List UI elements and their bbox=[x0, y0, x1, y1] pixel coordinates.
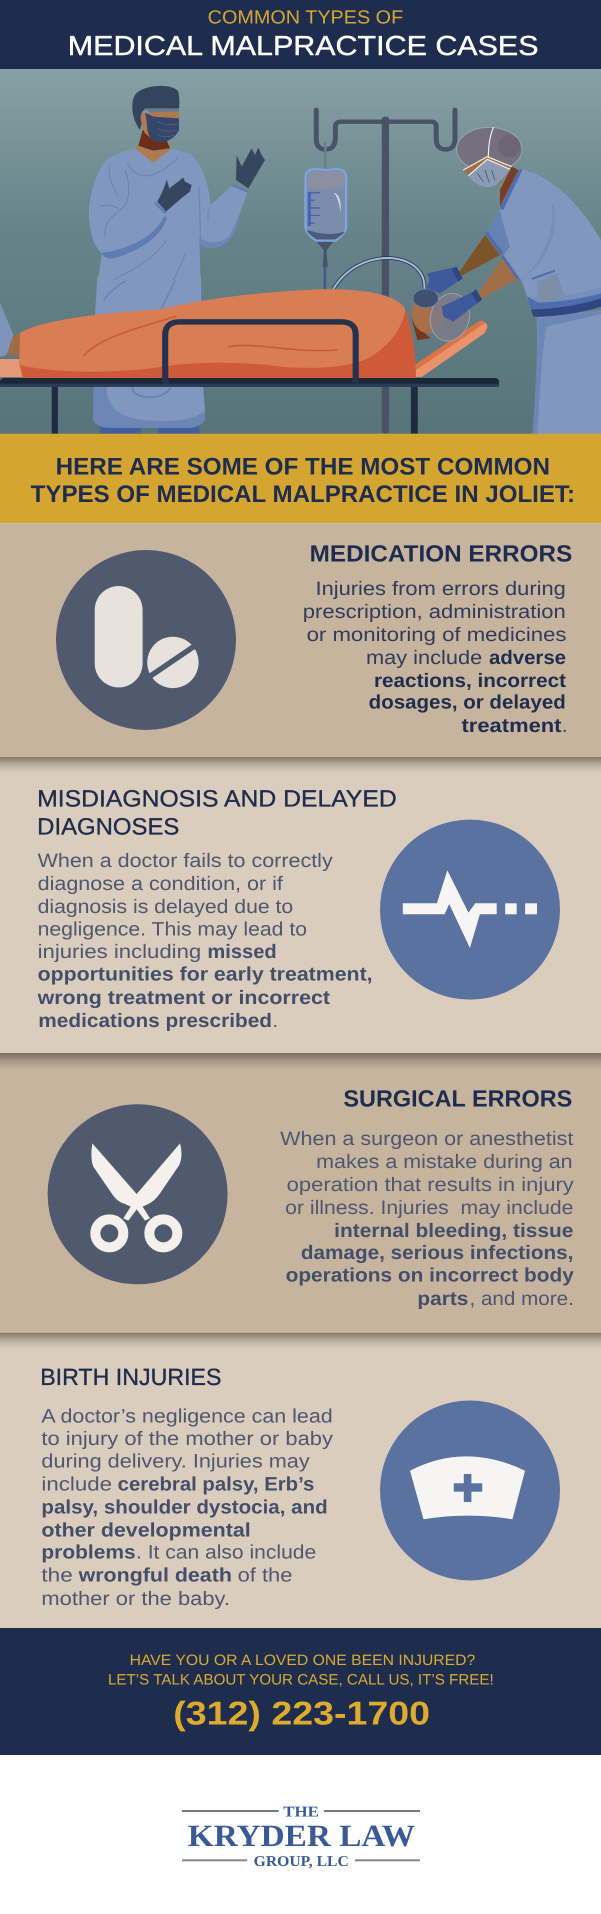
logo: the kryder law group: GROUP, LLC bbox=[254, 1854, 349, 1870]
call to action banner bbox=[0, 1628, 601, 1755]
text block: surgical errors: When a surgeon or anesthetist bbox=[280, 1128, 574, 1150]
banner heading: TYPES OF MEDICAL MALPRACTICE IN JOLIET: bbox=[31, 481, 575, 508]
text block: medication errors: reactions, incorrect bbox=[374, 670, 567, 692]
call to action text bbox=[108, 1652, 494, 1688]
illustration: operating room scene bbox=[0, 69, 601, 434]
text block: surgical errors: , and more. bbox=[470, 1288, 574, 1310]
text block: medication errors: or monitoring of medicines bbox=[307, 624, 567, 646]
heading: medication errors: MEDICATION ERRORS bbox=[310, 541, 572, 567]
logo: the kryder law group bbox=[0, 1755, 601, 1914]
text block: medication errors: prescription, administration bbox=[303, 601, 566, 623]
stretcher mat bbox=[0, 321, 488, 377]
text block: misdiagnosis: . bbox=[272, 1010, 278, 1032]
text block: misdiagnosis: When a doctor fails to correctly bbox=[38, 850, 333, 872]
text block: surgical errors: parts bbox=[417, 1288, 469, 1310]
patient arm bbox=[0, 303, 21, 357]
text block: birth injuries: include bbox=[41, 1474, 112, 1496]
gold banner bbox=[0, 434, 601, 523]
text block: birth injuries: during delivery. Injuries may bbox=[41, 1451, 310, 1473]
nurse and patient head bbox=[412, 127, 601, 434]
nurse shirt bbox=[486, 169, 601, 309]
text block: medication errors bbox=[303, 578, 567, 737]
panel: medication errors bbox=[0, 523, 601, 757]
text block: birth injuries: the bbox=[41, 1565, 73, 1587]
icon: pills bbox=[56, 550, 236, 730]
call to action text: HAVE YOU OR A LOVED ONE BEEN INJURED? bbox=[130, 1652, 475, 1669]
nurse arms bbox=[458, 235, 500, 276]
text block: misdiagnosis: diagnosis is delayed due to bbox=[38, 896, 293, 918]
heading: birth injuries: BIRTH INJURIES bbox=[40, 1364, 222, 1390]
text block: misdiagnosis: negligence. This may lead to bbox=[38, 919, 307, 941]
heading: misdiagnosis and delayed diagnoses bbox=[37, 786, 397, 840]
patient body under sheet bbox=[19, 289, 416, 378]
stretcher frame bbox=[0, 322, 499, 434]
doctor bbox=[89, 86, 265, 434]
text block: medication errors: adverse bbox=[489, 647, 566, 669]
text block: birth injuries: cerebral palsy, Erb’s bbox=[118, 1474, 314, 1496]
banner heading: HERE ARE SOME OF THE MOST COMMON bbox=[56, 453, 550, 480]
oxygen tube bbox=[333, 258, 424, 290]
logo: the kryder law group: THE bbox=[283, 1805, 319, 1821]
icon: heartbeat line bbox=[380, 820, 560, 1000]
text block: birth injuries: other developmental bbox=[41, 1519, 251, 1541]
iv bag bbox=[305, 169, 346, 241]
text block: misdiagnosis bbox=[37, 850, 373, 1032]
text block: surgical errors: internal bleeding, tissue bbox=[334, 1220, 574, 1242]
header kicker: COMMON TYPES OF bbox=[208, 8, 403, 29]
text block: birth injuries: wrongful death bbox=[78, 1565, 232, 1587]
text block: misdiagnosis: missed bbox=[207, 941, 277, 963]
icon: nurse cap bbox=[380, 1400, 560, 1580]
text block: surgical errors: or illness. Injuries may include bbox=[285, 1197, 573, 1219]
text block: birth injuries: mother or the baby. bbox=[41, 1588, 230, 1610]
doctor upper body bbox=[89, 86, 265, 281]
heading: surgical errors: SURGICAL ERRORS bbox=[343, 1086, 572, 1112]
doctor lower gown bbox=[93, 276, 205, 434]
text block: misdiagnosis: wrong treatment or incorrect bbox=[37, 987, 331, 1009]
text block: misdiagnosis: diagnose a condition, or if bbox=[38, 873, 284, 895]
text block: medication errors: Injuries from errors during bbox=[316, 578, 566, 600]
banner heading bbox=[31, 453, 575, 508]
panel: misdiagnosis and delayed diagnoses bbox=[0, 757, 601, 1053]
text block: misdiagnosis: injuries including bbox=[38, 941, 201, 963]
patient head bbox=[412, 289, 475, 345]
text block: birth injuries: A doctor’s negligence can lead bbox=[41, 1406, 333, 1428]
nurse gloves bbox=[427, 267, 463, 293]
text block: birth injuries: of the bbox=[238, 1565, 292, 1587]
text block: medication errors: dosages, or delayed bbox=[369, 692, 566, 714]
text block: birth injuries: problems bbox=[41, 1542, 136, 1564]
text block: surgical errors: makes a mistake during an bbox=[316, 1151, 573, 1173]
logo: the kryder law group: KRYDER LAW bbox=[188, 1818, 415, 1853]
phone number: (312) 223-1700 bbox=[173, 1694, 430, 1731]
text block: birth injuries: to injury of the mother or baby bbox=[41, 1428, 333, 1450]
text block: misdiagnosis: medications prescribed bbox=[38, 1010, 272, 1032]
text block: surgical errors: damage, serious infections, bbox=[301, 1242, 573, 1264]
nurse head bbox=[500, 167, 518, 207]
text block: birth injuries bbox=[41, 1406, 333, 1610]
text block: misdiagnosis: opportunities for early treatment, bbox=[38, 964, 373, 986]
text block: surgical errors bbox=[280, 1128, 574, 1310]
iv pole bbox=[316, 110, 455, 434]
panel: surgical errors bbox=[0, 1053, 601, 1333]
icon: scissors bbox=[48, 1104, 228, 1284]
call to action text: LET’S TALK ABOUT YOUR CASE, CALL US, IT’S FREE! bbox=[108, 1671, 494, 1688]
heading: misdiagnosis and delayed diagnoses: MISDIAGNOSIS AND DELAYED bbox=[37, 786, 397, 812]
panel: birth injuries bbox=[0, 1333, 601, 1628]
text block: birth injuries: . It can also include bbox=[136, 1542, 316, 1564]
text block: birth injuries: palsy, shoulder dystocia, and bbox=[41, 1496, 328, 1518]
title: MEDICAL MALPRACTICE CASES bbox=[68, 30, 539, 61]
text block: medication errors: treatment bbox=[462, 715, 562, 737]
text block: medication errors: may include bbox=[366, 647, 482, 669]
text block: medication errors: . bbox=[562, 715, 567, 737]
header banner bbox=[0, 0, 601, 70]
text block: surgical errors: operation that results in injury bbox=[287, 1174, 574, 1196]
text block: surgical errors: operations on incorrect body bbox=[286, 1265, 574, 1287]
nurse pants bbox=[533, 310, 601, 434]
heading: misdiagnosis and delayed diagnoses: DIAGNOSES bbox=[37, 814, 179, 840]
